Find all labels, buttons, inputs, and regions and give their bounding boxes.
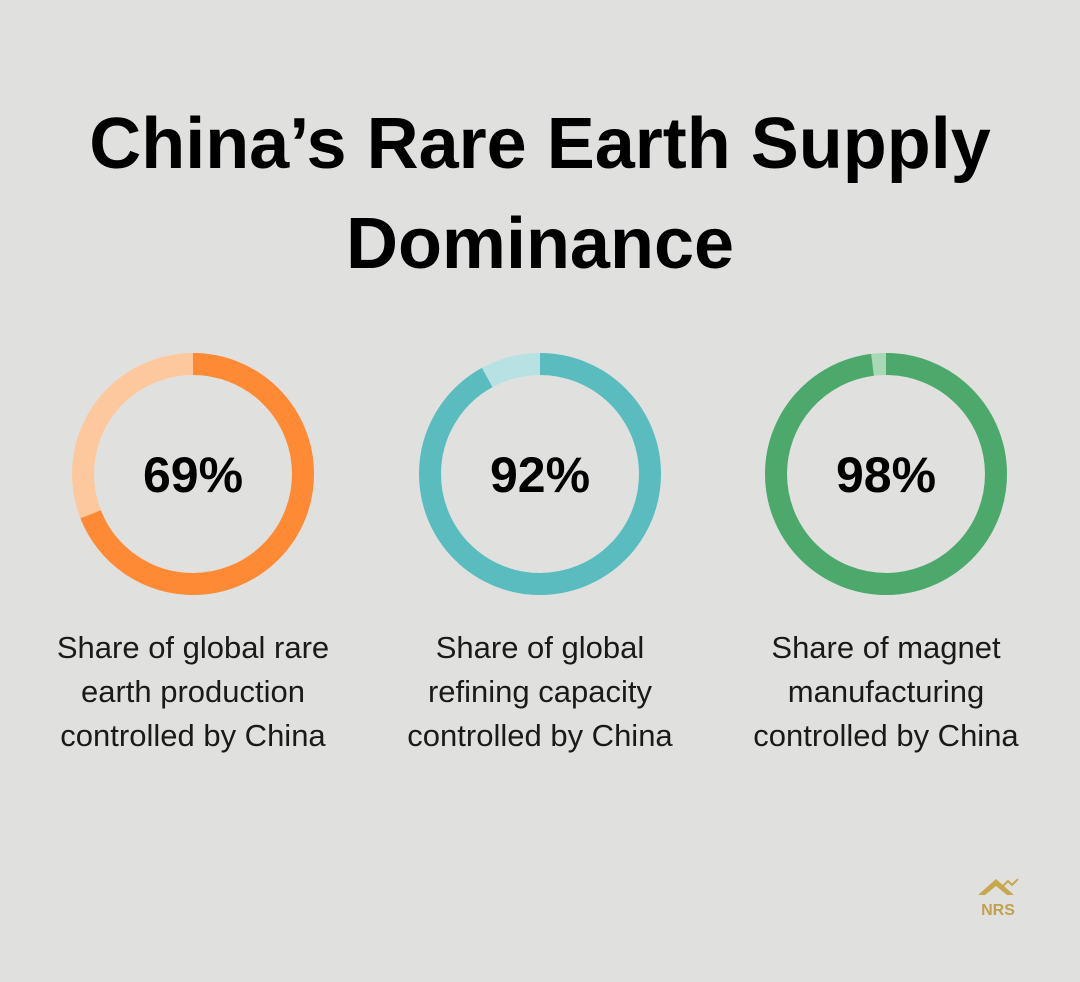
logo: NRS: NRS: [981, 902, 1015, 919]
donut: 69%: [83, 364, 303, 584]
label: magnet: manufacturing: [788, 674, 984, 709]
label: production: Share of global rare: [57, 630, 329, 665]
donut: 92%: [430, 364, 650, 584]
label: production: [57, 630, 329, 753]
label: refining: Share of global: [436, 630, 644, 665]
label: refining: refining capacity: [428, 674, 652, 709]
value: 92%: 92%: [490, 447, 590, 503]
label: magnet: Share of magnet: [771, 630, 1001, 665]
title: China’s Rare Earth Supply: [89, 104, 991, 184]
logo: NRS: [978, 879, 1018, 919]
label: production: earth production: [81, 674, 305, 709]
label: refining: controlled by China: [407, 718, 673, 753]
donut: 98%: [776, 364, 996, 584]
label: magnet: controlled by China: [753, 718, 1019, 753]
label: refining: [407, 630, 673, 753]
value: 98%: 98%: [836, 447, 936, 503]
label: magnet: [753, 630, 1019, 753]
value: 69%: 69%: [143, 447, 243, 503]
label: production: controlled by China: [60, 718, 326, 753]
title: [89, 104, 991, 284]
title: Dominance: [346, 204, 734, 284]
